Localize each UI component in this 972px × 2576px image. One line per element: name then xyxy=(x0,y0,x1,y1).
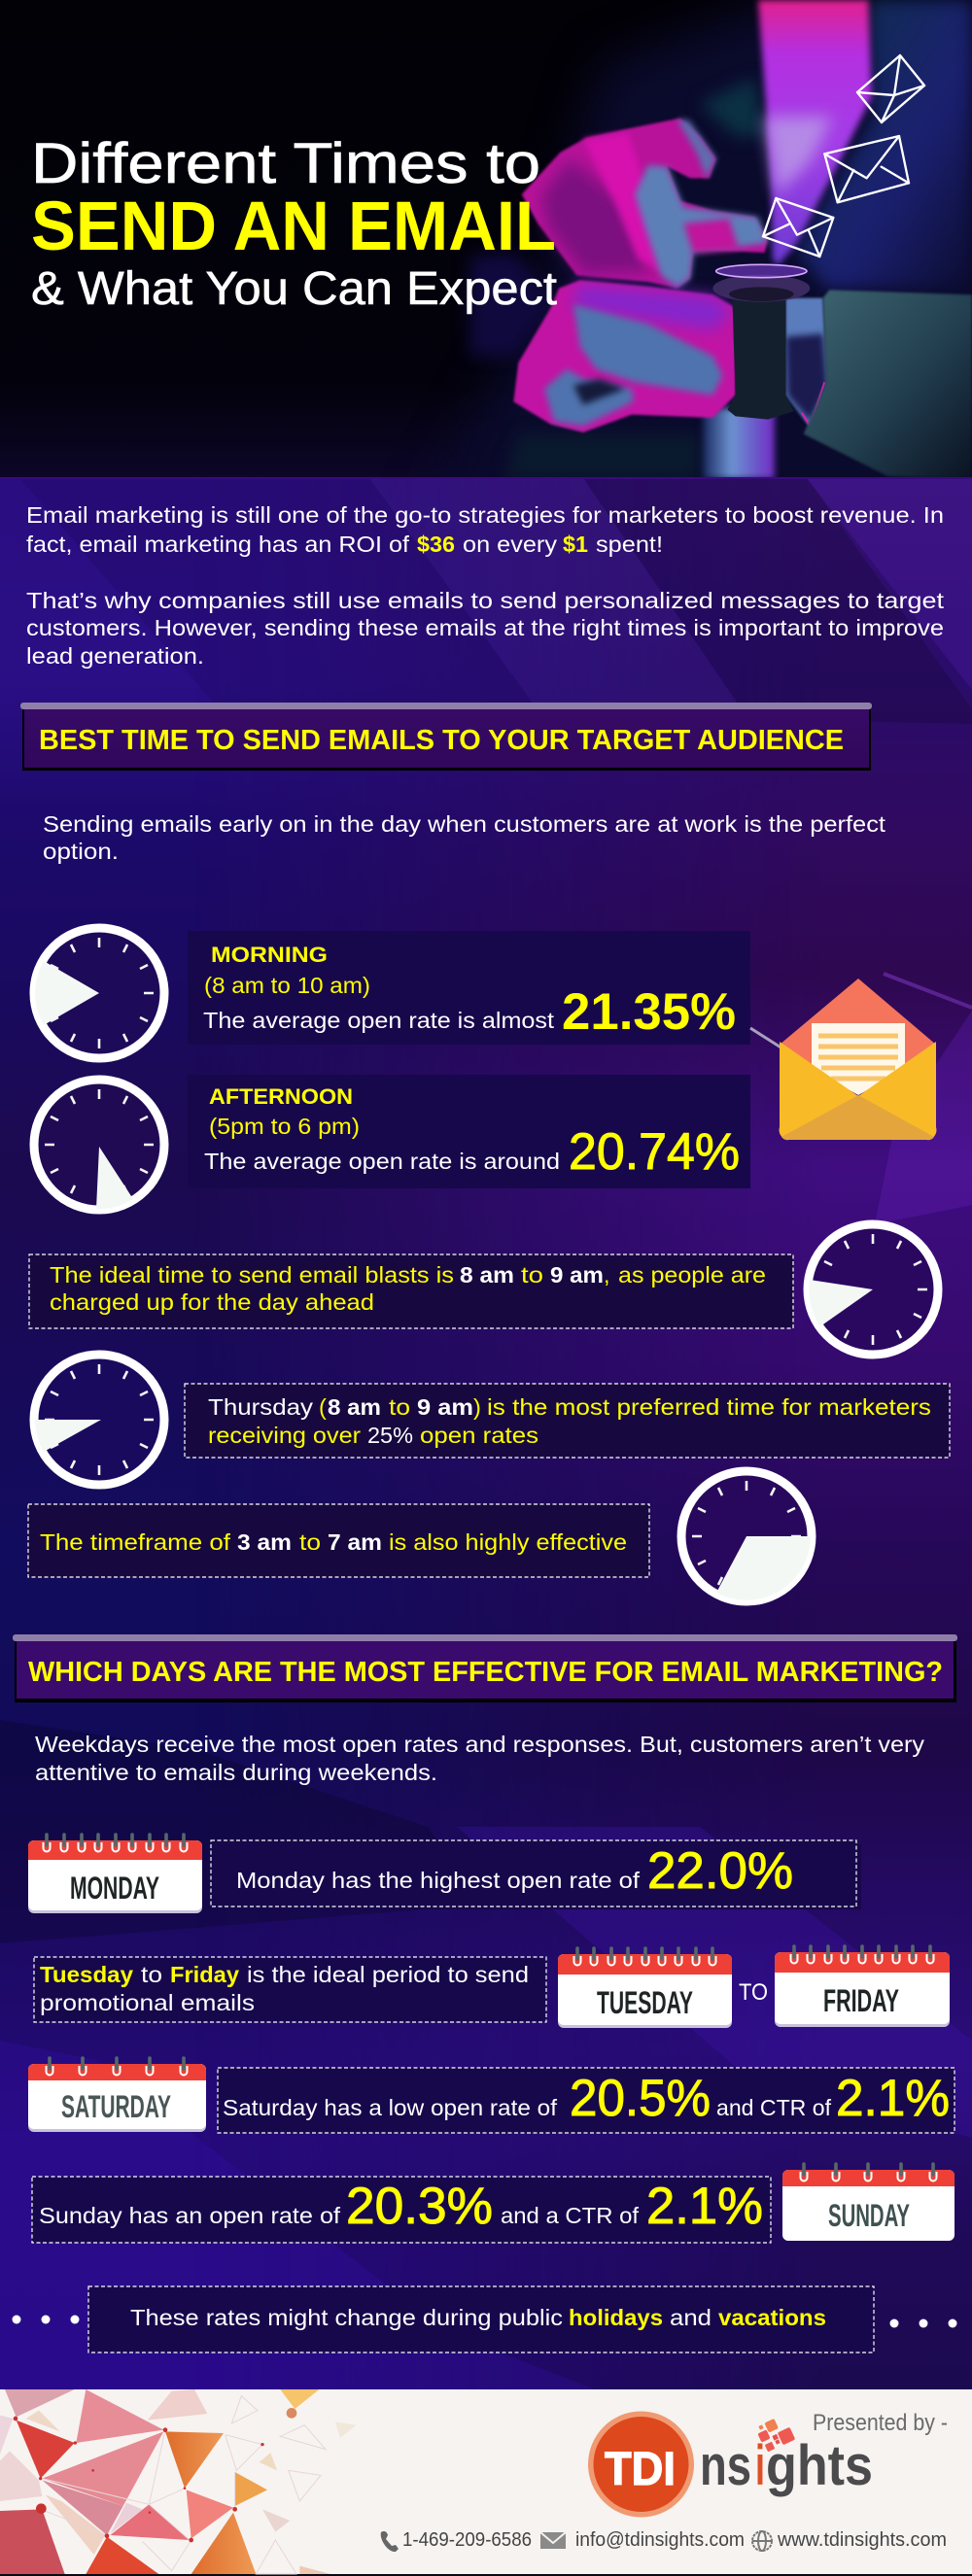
panel: saturday stat: 20.5% xyxy=(570,2070,711,2127)
callout: ideal time to send xyxy=(29,1254,793,1328)
panel: tuesday to friday xyxy=(34,1957,546,2022)
text: weekdays xyxy=(35,1732,924,1785)
header photo: hand and smartwatch xyxy=(0,0,972,479)
callout: 3 am to 7 am: 7 am xyxy=(328,1529,382,1555)
icon: email envelope bottom xyxy=(763,198,833,257)
callout: 3 am to 7 am: is also highly effective xyxy=(389,1529,627,1555)
contact line xyxy=(381,2529,947,2552)
intro text block: $36 xyxy=(417,532,455,557)
clock: morning xyxy=(34,928,164,1058)
panel: monday stat: 22.0% xyxy=(647,1842,793,1900)
calendar: friday: FRIDAY xyxy=(823,1983,899,2018)
callout: thursday: is the most preferred time for marketers xyxy=(487,1394,931,1420)
intro text block: lead generation. xyxy=(26,643,204,669)
callout: holidays note: These rates might change during public xyxy=(130,2305,563,2330)
calendar: saturday: SATURDAY xyxy=(61,2089,171,2124)
callout: ideal time to send: to xyxy=(521,1262,543,1288)
panel: sunday stat: 2.1% xyxy=(646,2178,763,2235)
callout: thursday: receiving over xyxy=(208,1423,361,1448)
calendar: saturday xyxy=(28,2058,206,2132)
text: weekdays: Weekdays receive the most open rates and responses. But, customers aren’t very xyxy=(35,1732,924,1757)
panel: afternoon: 20.74% xyxy=(569,1123,740,1181)
callout: thursday: 9 am xyxy=(417,1394,473,1420)
panel: afternoon: AFTERNOON xyxy=(209,1084,353,1109)
intro text block xyxy=(26,502,945,669)
heading: best time: BEST TIME TO SEND EMAILS TO YOUR TARGET AUDIENCE xyxy=(39,725,844,756)
callout: thursday: 8 am xyxy=(328,1394,381,1420)
intro text block: on every xyxy=(463,532,557,557)
logo: TDInsights: i xyxy=(755,2434,765,2497)
panel: saturday stat: 2.1% xyxy=(836,2070,950,2127)
callout: holidays note xyxy=(88,2286,874,2353)
dots left xyxy=(12,2315,80,2324)
intro text block: customers. However, sending these emails at the right times is important to improve xyxy=(26,615,944,640)
panel: morning: MORNING xyxy=(211,943,328,967)
panel: tuesday to friday: is the ideal period to send xyxy=(247,1962,529,1987)
label: TO: TO xyxy=(739,1979,768,2006)
dots right xyxy=(890,2318,956,2328)
text: presented by: Presented by - xyxy=(813,2410,948,2436)
icon: email envelope top xyxy=(857,55,924,122)
panel: sunday stat: Sunday has an open rate of xyxy=(39,2203,341,2228)
clock: 3 to 7 xyxy=(681,1471,812,1601)
text: sending emails early: option. xyxy=(43,839,119,864)
text: sending emails early xyxy=(43,811,886,864)
clock: 8 to 9 am xyxy=(808,1224,938,1355)
calendar: sunday: SUNDAY xyxy=(828,2198,910,2233)
callout: ideal time to send: The ideal time to send email blasts is xyxy=(50,1262,454,1288)
callout: ideal time to send: 8 am xyxy=(460,1262,514,1288)
intro text block: fact, email marketing has an ROI of xyxy=(26,532,409,557)
logo: TDInsights: ns xyxy=(700,2434,751,2497)
calendar: tuesday xyxy=(558,1948,732,2028)
calendar: monday xyxy=(28,1835,202,1913)
panel: tuesday to friday: to xyxy=(141,1962,162,1987)
panel: monday stat: Monday has the highest open rate of xyxy=(236,1868,640,1893)
text: sending emails early: Sending emails early on in the day when customers are at work is the perfect xyxy=(43,811,886,837)
icon: open envelope with letter xyxy=(750,974,972,1140)
panel: sunday stat: and a CTR of xyxy=(501,2203,639,2228)
panel: afternoon: (5pm to 6 pm) xyxy=(209,1114,360,1139)
intro text block: $1 xyxy=(563,532,588,557)
callout: thursday xyxy=(185,1384,950,1458)
panel: afternoon xyxy=(188,1075,750,1188)
callout: thursday: to xyxy=(389,1394,410,1420)
clock: thursday xyxy=(34,1355,164,1485)
callout: 3 am to 7 am: 3 am xyxy=(237,1529,292,1555)
title: & What You Can Expect xyxy=(31,263,557,315)
callout: ideal time to send: as people are xyxy=(618,1262,766,1288)
footer panel xyxy=(0,2389,972,2576)
panel: tuesday to friday: Friday xyxy=(170,1962,239,1987)
callout: holidays note: holidays xyxy=(569,2305,663,2330)
panel: saturday stat: Saturday has a low open rate of xyxy=(223,2095,557,2120)
callout: thursday: open rates xyxy=(420,1423,538,1448)
calendar: tuesday: TUESDAY xyxy=(597,1985,693,2020)
text: weekdays: attentive to emails during weekends. xyxy=(35,1760,437,1785)
logo: TDInsights: TDI xyxy=(605,2444,676,2495)
callout: ideal time to send: charged up for the day ahead xyxy=(50,1289,374,1315)
clock: afternoon xyxy=(34,1080,164,1210)
panel: saturday stat xyxy=(218,2068,955,2133)
panel: tuesday to friday: promotional emails xyxy=(40,1990,255,2015)
contact line: 1-469-209-6586 xyxy=(402,2529,532,2551)
intro text block: That’s why companies still use emails to send personalized messages to target xyxy=(26,588,945,613)
panel: tuesday to friday: Tuesday xyxy=(40,1962,133,1987)
calendar: sunday xyxy=(782,2164,955,2241)
heading: which days: WHICH DAYS ARE THE MOST EFFECTIVE FOR EMAIL MARKETING? xyxy=(28,1657,943,1688)
callout: holidays note: vacations xyxy=(718,2305,826,2330)
calendar: monday: MONDAY xyxy=(70,1871,159,1906)
panel: morning: (8 am to 10 am) xyxy=(204,973,370,998)
callout: thursday: Thursday xyxy=(208,1394,313,1420)
callout: thursday: 25% xyxy=(367,1423,413,1448)
panel: morning: The average open rate is almost xyxy=(203,1008,554,1033)
panel: sunday stat xyxy=(32,2177,771,2243)
panel: sunday stat: 20.3% xyxy=(346,2178,493,2235)
callout: thursday: ) xyxy=(473,1394,481,1420)
calendar: friday xyxy=(775,1946,950,2027)
panel: monday stat xyxy=(211,1840,861,1909)
callout: 3 am to 7 am: to xyxy=(299,1529,321,1555)
page background xyxy=(0,478,972,2392)
logo: TDInsights: ghts xyxy=(766,2434,873,2497)
callout: ideal time to send: , xyxy=(604,1262,610,1288)
heading: best time xyxy=(20,703,872,771)
callout: holidays note: and xyxy=(670,2305,712,2330)
callout: ideal time to send: 9 am xyxy=(550,1262,604,1288)
panel: saturday stat: and CTR of xyxy=(716,2095,831,2120)
callout: 3 am to 7 am: The timeframe of xyxy=(40,1529,231,1555)
intro text block: spent! xyxy=(596,532,663,557)
title: Different Times to xyxy=(31,132,540,195)
logo: TDInsights xyxy=(588,2412,873,2517)
panel: afternoon: The average open rate is around xyxy=(204,1149,560,1174)
panel: morning xyxy=(188,931,750,1045)
callout: 3 am to 7 am xyxy=(28,1504,649,1577)
panel: morning: 21.35% xyxy=(562,983,736,1041)
icon: email envelope middle xyxy=(824,136,909,202)
footer decoration: polygon network xyxy=(0,2389,357,2574)
contact line: info@tdinsights.com xyxy=(575,2529,745,2551)
callout: thursday: ( xyxy=(319,1394,327,1420)
heading: which days xyxy=(13,1634,957,1702)
intro text block: Email marketing is still one of the go-to strategies for marketers to boost revenue. In xyxy=(26,502,944,528)
contact line: www.tdinsights.com xyxy=(777,2529,947,2551)
title xyxy=(31,132,557,315)
title: SEND AN EMAIL xyxy=(31,189,556,265)
